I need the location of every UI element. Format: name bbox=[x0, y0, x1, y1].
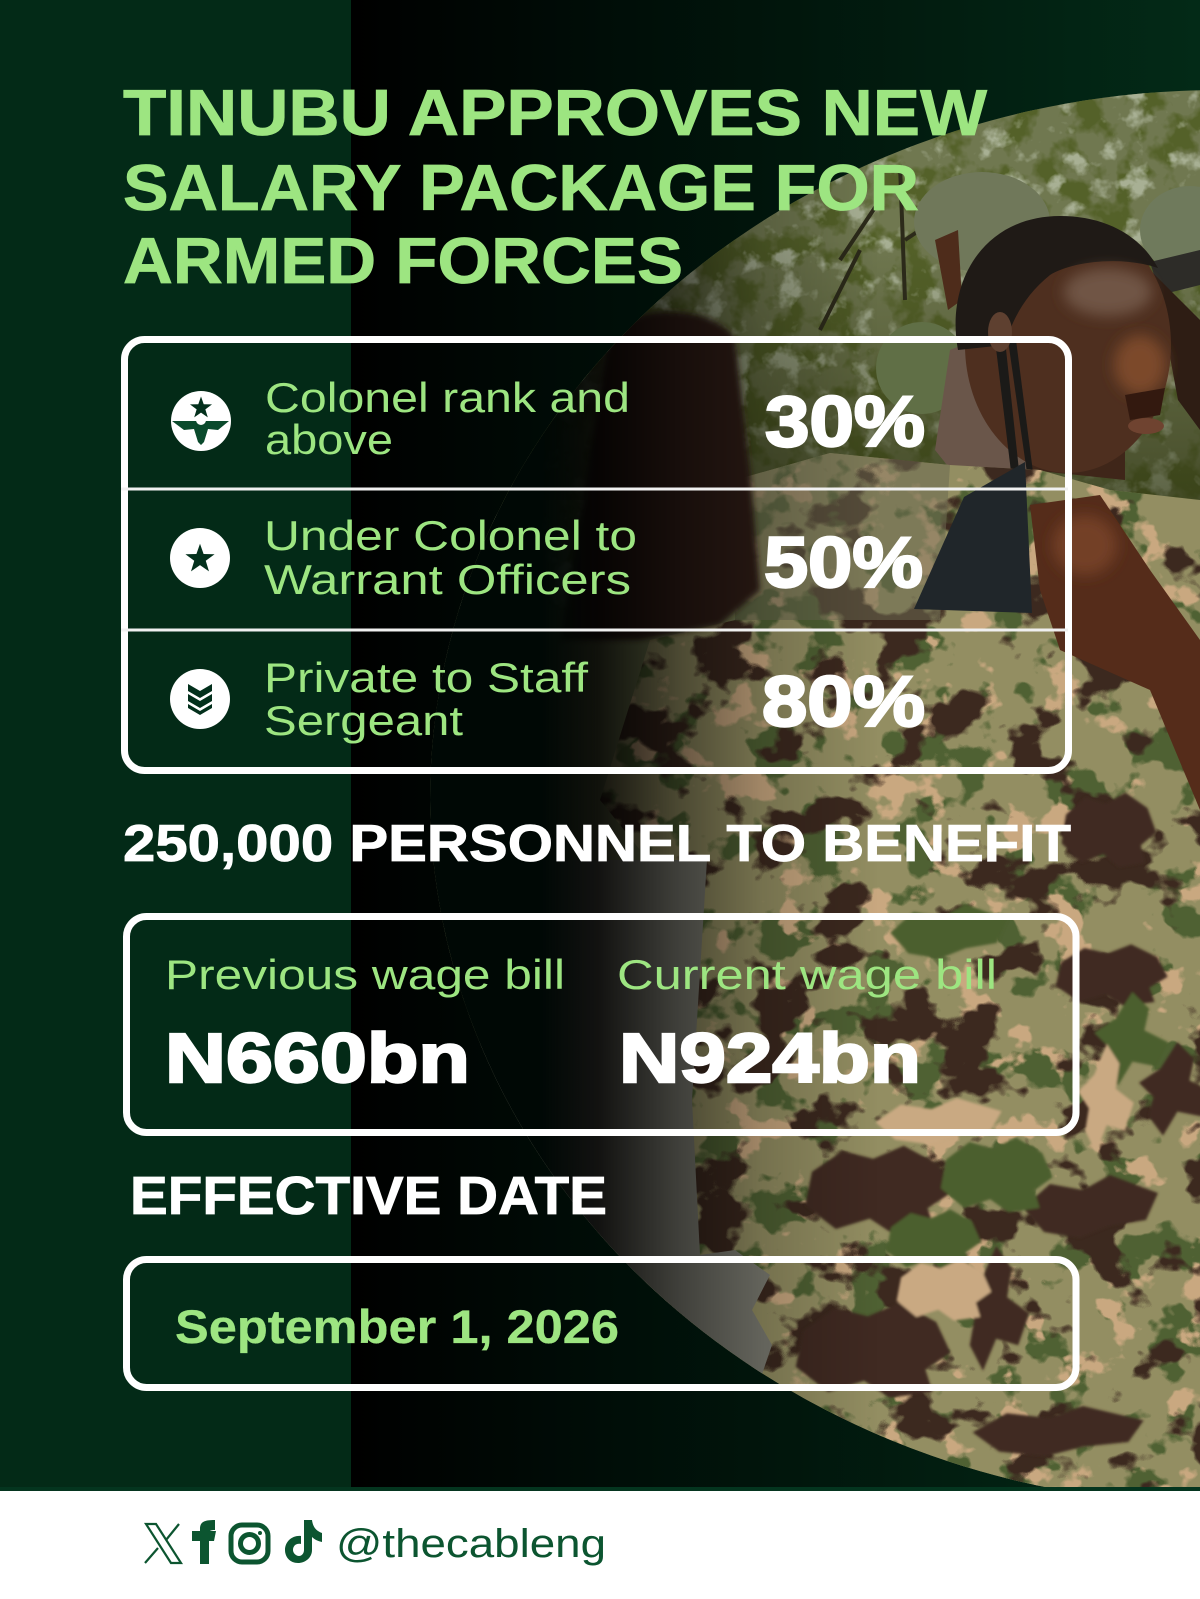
current wage bill bbox=[617, 951, 997, 1097]
icon: Instagram bbox=[231, 1525, 268, 1562]
dark gradient panel bbox=[351, 0, 1200, 1487]
heading: effective date: EFFECTIVE DATE bbox=[130, 1166, 607, 1226]
heading: personnel to benefit: 250,000 PERSONNEL TO BENEFIT bbox=[123, 815, 1071, 873]
right soldier arm and hand bbox=[1030, 495, 1200, 810]
panel: effective date value: September 1, 2026 bbox=[175, 1300, 619, 1353]
grey floor bbox=[480, 860, 772, 1400]
previous wage bill: N660bn bbox=[165, 1019, 470, 1097]
left soldier neck bbox=[935, 347, 1026, 469]
row: under colonel to warrant officers bbox=[170, 512, 923, 603]
panel: effective date value bbox=[126, 1260, 1076, 1388]
icon: star bbox=[170, 528, 230, 588]
panel: pay rise by rank bbox=[121, 340, 1068, 770]
icon: X bbox=[145, 1524, 181, 1563]
row: under colonel to warrant officers: Under Colonel to bbox=[264, 512, 637, 559]
black mask bbox=[914, 462, 1032, 613]
upper sleeve faded tone bbox=[735, 453, 950, 620]
icon: Facebook bbox=[192, 1520, 216, 1564]
left soldier arm bbox=[560, 312, 760, 640]
right soldier rifle bbox=[1150, 270, 1200, 430]
row: private to staff sergeant: Private to Staff bbox=[264, 654, 588, 701]
row: private to staff sergeant: Sergeant bbox=[264, 697, 463, 744]
soldier photo in curved frame bbox=[430, 90, 1200, 1490]
left fade overlay bbox=[430, 177, 854, 1416]
previous wage bill bbox=[165, 951, 565, 1097]
row: private to staff sergeant: 80% bbox=[762, 663, 925, 742]
row: colonel rank and above: Colonel rank and bbox=[265, 374, 630, 421]
title: TINUBU APPROVES NEW bbox=[123, 76, 988, 149]
title bbox=[123, 76, 988, 297]
title: ARMED FORCES bbox=[123, 224, 683, 297]
previous wage bill: Previous wage bill bbox=[165, 951, 565, 998]
camouflage uniform bbox=[600, 450, 1200, 1490]
row: under colonel to warrant officers: Warrant Officers bbox=[264, 556, 631, 603]
title: SALARY PACKAGE FOR bbox=[123, 151, 919, 224]
row: under colonel to warrant officers: 50% bbox=[764, 524, 923, 603]
handle: @thecableng bbox=[336, 1522, 606, 1566]
panel: wage bill bbox=[126, 916, 1076, 1132]
row: colonel rank and above: 30% bbox=[765, 383, 925, 462]
row: colonel rank and above bbox=[171, 374, 925, 463]
current wage bill: Current wage bill bbox=[617, 951, 997, 998]
current wage bill: N924bn bbox=[619, 1019, 921, 1097]
row: colonel rank and above: above bbox=[265, 416, 393, 463]
icon: chevrons bbox=[170, 669, 230, 729]
helmets bbox=[876, 172, 1200, 414]
right soldier head bbox=[956, 216, 1171, 480]
footer band bbox=[0, 1487, 1200, 1599]
row: private to staff sergeant bbox=[170, 654, 925, 744]
icon: TikTok bbox=[285, 1520, 322, 1563]
icon: star and eagle bbox=[171, 391, 231, 451]
